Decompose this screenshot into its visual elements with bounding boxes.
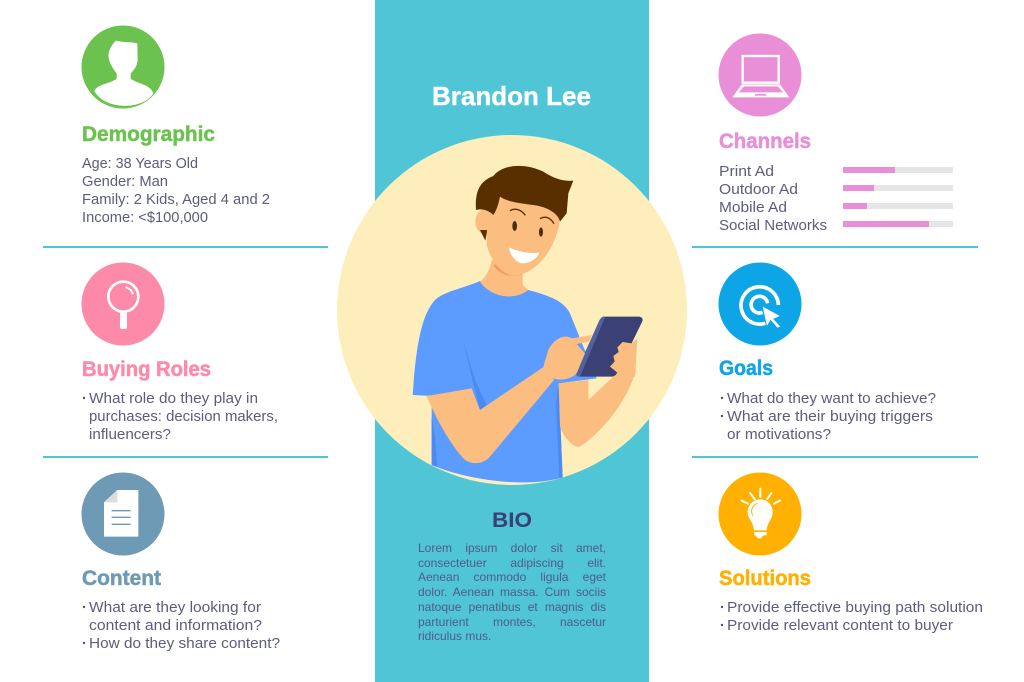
section: Content <box>82 472 280 652</box>
content details: What are they looking for <box>89 599 261 616</box>
heading: Buying Roles <box>82 358 211 381</box>
demographic details: Gender: Man <box>82 173 168 190</box>
section: Channels <box>718 34 953 234</box>
title: Brandon Lee: Brandon Lee <box>432 81 591 111</box>
bio heading: BIO <box>492 509 532 532</box>
heading: Solutions <box>719 567 811 590</box>
bio paragraph: ridiculus mus. <box>418 629 491 643</box>
section: Goals <box>718 262 936 443</box>
section: Solutions <box>718 472 983 634</box>
buying roles details: influencers? <box>89 426 171 443</box>
solutions details: Provide relevant content to buyer <box>727 617 953 634</box>
goals details: or motivations? <box>727 426 831 443</box>
icon: laptop <box>718 34 802 116</box>
channel labels: Outdoor Ad <box>719 181 798 198</box>
content details: How do they share content? <box>89 635 280 652</box>
bio paragraph: natoque penatibus et magnis dis <box>418 600 606 614</box>
goals details: What are their buying triggers <box>727 408 933 425</box>
heading: Demographic <box>82 123 215 146</box>
content details <box>83 599 280 652</box>
bio paragraph: consectetuer adipiscing elit. <box>418 556 606 570</box>
demographic details <box>82 155 270 226</box>
buying roles details: purchases: decision makers, <box>89 408 278 425</box>
demographic details: Family: 2 Kids, Aged 4 and 2 <box>82 191 270 208</box>
solutions details: Provide effective buying path solution <box>727 599 983 616</box>
channel labels: Social Networks <box>719 217 827 234</box>
icon: magnifier <box>82 262 164 346</box>
bio paragraph: parturient montes, nascetur <box>418 615 606 629</box>
channel labels: Mobile Ad <box>719 199 787 216</box>
demographic details: Age: 38 Years Old <box>82 155 198 172</box>
goals details <box>721 390 936 443</box>
section: Buying Roles <box>82 262 278 443</box>
solutions details <box>721 599 983 634</box>
buying roles details: What role do they play in <box>89 390 258 407</box>
goals details: What do they want to achieve? <box>727 390 936 407</box>
bio paragraph <box>418 541 606 643</box>
content details: content and information? <box>89 617 262 634</box>
channel bars <box>843 167 953 227</box>
icon: target with cursor <box>718 262 802 346</box>
demographic details: Income: <$100,000 <box>82 209 208 226</box>
icon: light bulb <box>718 472 802 556</box>
heading: Channels <box>719 130 811 153</box>
heading: Content <box>82 567 161 590</box>
bio paragraph: dolor. Aenean massa. Cum sociis <box>418 585 606 599</box>
channel labels: Print Ad <box>719 163 774 180</box>
icon: person <box>82 26 164 108</box>
heading: Goals <box>719 357 773 380</box>
bio paragraph: Aenean commodo ligula eget <box>418 570 606 584</box>
icon: document <box>82 472 164 556</box>
center teal panel <box>375 0 649 682</box>
bio paragraph: Lorem ipsum dolor sit amet, <box>418 541 606 555</box>
section: Demographic <box>82 26 270 226</box>
buying roles details <box>83 390 278 443</box>
channel labels <box>719 163 827 234</box>
portrait circle <box>337 135 687 485</box>
character illustration <box>413 166 643 482</box>
